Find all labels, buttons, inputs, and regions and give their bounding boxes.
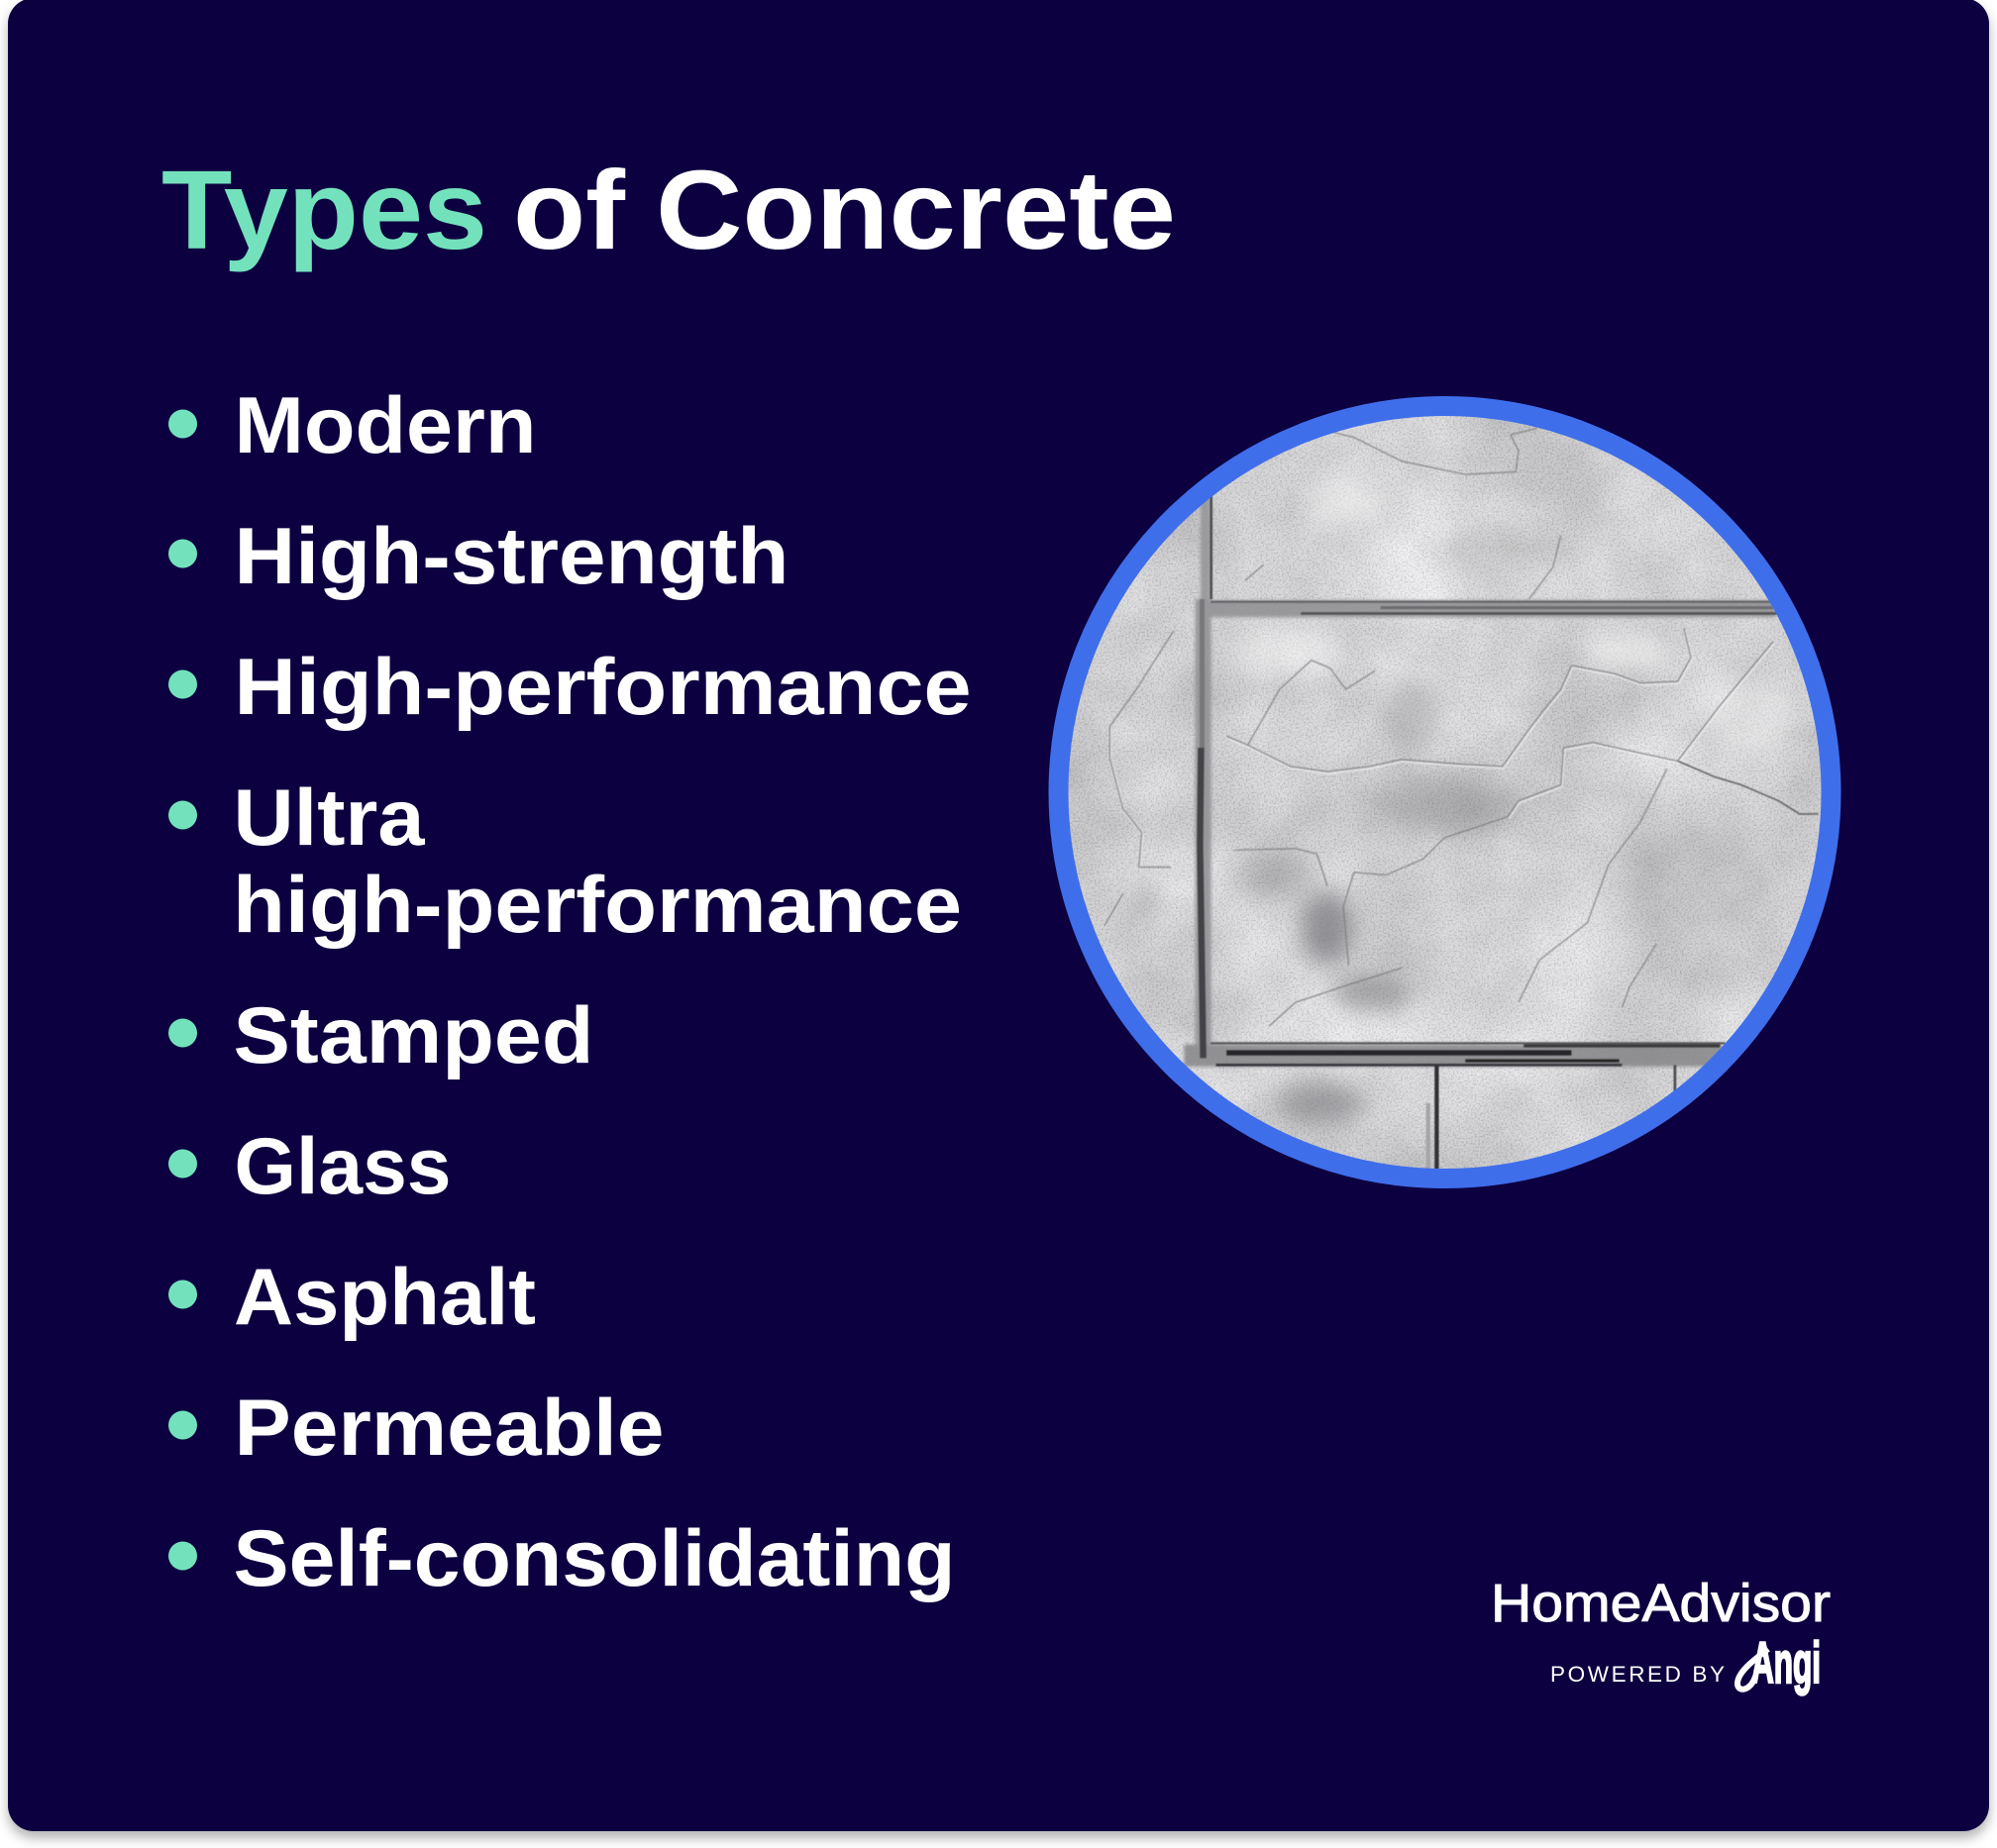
title — [161, 148, 1176, 272]
grout dark lines — [1200, 496, 1777, 1170]
photo: stamped concrete in circular frame — [1050, 396, 1842, 1188]
list item: Ultra high-performance: high-performance — [233, 861, 962, 950]
list item: Self-consolidating: Self-consolidating — [234, 1514, 955, 1603]
list item: Permeable: Permeable — [234, 1384, 664, 1473]
logo: Angi swash — [1737, 1649, 1768, 1690]
title: Types — [161, 148, 487, 272]
list item: Ultra high-performance: Ultra — [234, 773, 425, 863]
logo: HomeAdvisor powered by Angi — [1491, 1574, 1831, 1695]
list item: Glass: Glass — [234, 1122, 452, 1211]
list: types of concrete — [168, 381, 971, 1603]
logo: HomeAdvisor powered by Angi: Angi — [1751, 1631, 1821, 1695]
list item: High-performance: High-performance — [234, 643, 971, 732]
title: Concrete — [656, 148, 1176, 272]
list item: High-strength: High-strength — [234, 512, 788, 601]
stamped crack highlights — [1110, 631, 1774, 870]
title: of — [513, 148, 625, 272]
list item: Ultra high-performance — [168, 773, 962, 950]
stamped cracks — [1104, 428, 1819, 1026]
photo ring — [1058, 406, 1831, 1179]
logo: HomeAdvisor powered by Angi: POWERED BY — [1550, 1662, 1725, 1687]
dark and light patches, drawn in zoom coordinates — [1131, 477, 1794, 1124]
list item: Stamped: Stamped — [234, 991, 594, 1080]
soft grout bands — [1184, 496, 1776, 1064]
list item: Asphalt: Asphalt — [234, 1253, 536, 1342]
list item: Modern: Modern — [234, 381, 537, 470]
logo: HomeAdvisor powered by Angi: HomeAdvisor — [1491, 1574, 1831, 1633]
